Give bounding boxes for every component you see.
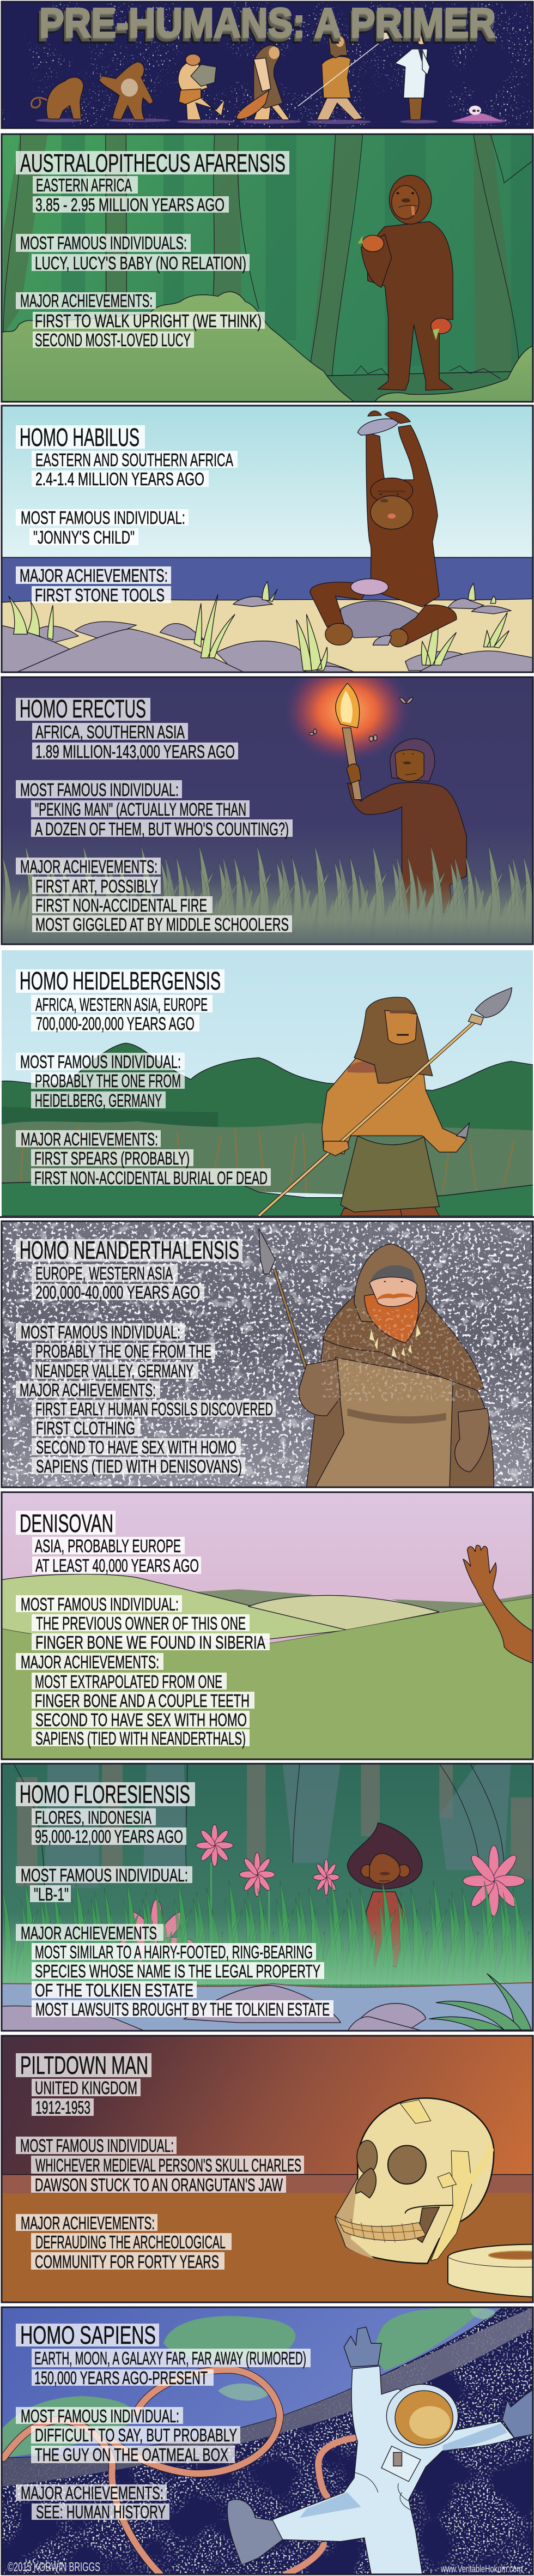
tape roll <box>448 2245 534 2297</box>
text block: major achievements <box>16 1380 276 1476</box>
text block: major achievements: SECOND TO HAVE SEX WITH HOMO <box>35 1710 247 1730</box>
panel: Australopithecus afarensis <box>1 134 534 402</box>
text block: major achievements: SECOND MOST-LOVED LUCY <box>35 330 191 350</box>
text block: place and dates <box>32 1807 186 1847</box>
copyright credit: ©2015 KORWIN BRIGGS <box>8 2560 100 2574</box>
panel: Piltdown man <box>0 2036 534 2302</box>
text block: major achievements <box>16 2483 169 2522</box>
text block: major achievements: FIRST EARLY HUMAN FOSSILS DISCOVERED <box>35 1399 273 1419</box>
text block: place and dates: 1.89 MILLION-143,000 YEARS AGO <box>35 741 235 762</box>
heading: Australopithecus afarensis <box>16 149 289 177</box>
text block: major achievements: FIRST ART, POSSIBLY <box>35 876 158 896</box>
text block: most famous individual: MOST FAMOUS INDIVIDUAL: <box>20 1052 181 1072</box>
sea and beach <box>0 558 534 672</box>
heading: Homo habilus: HOMO HABILUS <box>20 423 139 451</box>
title: stone lettering: PRE-HUMANS: A PRIMER <box>36 5 494 52</box>
text block: most famous individual <box>16 2135 304 2195</box>
text block: major achievements: FIRST SPEARS (PROBABLY) <box>34 1148 190 1168</box>
text block: major achievements: MAJOR ACHIEVEMENTS: <box>20 565 168 586</box>
heading: Homo sapiens: HOMO SAPIENS <box>20 2321 156 2349</box>
heading: Denisovan: DENISOVAN <box>20 1509 113 1537</box>
text block: major achievements: MOST SIMILAR TO A HAIRY-FOOTED, RING-BEARING <box>35 1942 313 1962</box>
text block: most famous individual: MOST FAMOUS INDIVIDUAL: <box>20 2135 174 2156</box>
text block: most famous individual: MOST FAMOUS INDIVIDUAL: <box>21 2406 179 2426</box>
neanderthal in furs with spear <box>259 1228 494 1487</box>
text block: place and dates: 3.85 - 2.95 MILLION YEARS AGO <box>35 195 224 215</box>
oxygen hose <box>3 2370 354 2574</box>
text block: most famous individual: PROBABLY THE ONE FROM THE <box>35 1341 211 1361</box>
text block: major achievements: FINGER BONE AND A COUPLE TEETH <box>35 1691 250 1711</box>
text block: major achievements: SAPIENS (TIED WITH NEANDERTHALS) <box>35 1728 246 1748</box>
text block: most famous individual <box>16 1052 185 1111</box>
text block: most famous individual: PROBABLY THE ONE FROM <box>35 1071 181 1091</box>
australopithecus figure with apples <box>357 175 453 390</box>
text block: major achievements <box>16 565 171 605</box>
line-up of evolving figures <box>32 30 438 124</box>
heading: Homo habilus <box>16 423 145 451</box>
text block: most famous individual: MOST FAMOUS INDIVIDUAL: <box>20 780 179 800</box>
habilus figure holding stone overhead <box>310 411 457 647</box>
text block: most famous individual: MOST FAMOUS INDIVIDUAL: <box>21 1865 188 1885</box>
text block: place and dates: 1912-1953 <box>35 2097 90 2117</box>
skull on purple pile <box>451 106 506 124</box>
heading: Homo neanderthalensis <box>16 1236 242 1264</box>
text block: place and dates <box>32 1536 201 1576</box>
text block: place and dates <box>32 722 238 762</box>
raised arm and hand <box>463 1545 534 1664</box>
text block: most famous individual: THE GUY ON THE OATMEAL BOX <box>35 2445 228 2465</box>
text block: major achievements: FIRST NON-ACCIDENTAL FIRE <box>35 895 207 915</box>
text block: most famous individuals: LUCY, LUCY'S BABY (NO RELATION) <box>35 253 246 273</box>
text block: place and dates: 200,000-40,000 YEARS AGO <box>35 1282 200 1302</box>
text block: most famous individual <box>16 508 189 547</box>
title: stone lettering: PRE-HUMANS: A PRIMER <box>39 0 496 46</box>
panel: Homo sapiens <box>0 2303 534 2574</box>
text block: major achievements: MOST GIGGLED AT BY MIDDLE SCHOOLERS <box>35 914 289 934</box>
text block: major achievements: DEFRAUDING THE ARCHEOLOGICAL <box>35 2232 226 2252</box>
forest trees <box>3 134 534 402</box>
heading: Piltdown man: PILTDOWN MAN <box>20 2051 148 2079</box>
taped skull <box>336 2098 494 2264</box>
text block: most famous individual: "PEKING MAN" (ACTUALLY MORE THAN <box>35 799 246 819</box>
text block: most famous individual: HEIDELBERG, GERMANY <box>35 1090 162 1111</box>
water, bank and rocks <box>0 1974 534 2032</box>
text block: major achievements <box>16 291 265 350</box>
text block: most famous individual: DAWSON STUCK TO AN ORANGUTAN'S JAW <box>35 2175 283 2195</box>
text block: place and dates <box>32 2078 141 2117</box>
text block: major achievements: SPECIES WHOSE NAME IS THE LEGAL PROPERTY <box>35 1961 320 1981</box>
text block: most famous individual: NEANDER VALLEY, GERMANY <box>35 1361 193 1381</box>
text block: most famous individuals: MOST FAMOUS INDIVIDUALS: <box>20 233 187 253</box>
heading: Homo heidelbergensis <box>16 967 224 995</box>
text block: most famous individual: DIFFICULT TO SAY, BUT PROBABLY <box>35 2425 237 2445</box>
heading: Homo erectus: HOMO ERECTUS <box>20 695 146 723</box>
text block: most famous individuals <box>16 233 250 273</box>
text block: most famous individual: WHICHEVER MEDIEVAL PERSON'S SKULL CHARLES <box>35 2155 301 2175</box>
text block: major achievements: SECOND TO HAVE SEX WITH HOMO <box>36 1437 236 1457</box>
text block: major achievements: MAJOR ACHIEVEMENTS: <box>21 1652 159 1672</box>
text block: place and dates: FLORES, INDONESIA <box>35 1807 151 1827</box>
text block: most famous individual <box>16 1865 192 1904</box>
text block: place and dates: EASTERN AFRICA <box>36 175 132 195</box>
text block: most famous individual <box>16 780 293 839</box>
heading: Denisovan <box>16 1509 116 1537</box>
panel: Homo habilus <box>0 406 534 672</box>
text block: most famous individual <box>16 1322 215 1381</box>
panel: Homo erectus <box>0 658 534 945</box>
text block: most famous individual: "JONNY'S CHILD" <box>33 527 135 547</box>
text block: place and dates: AFRICA, SOUTHERN ASIA <box>35 722 185 742</box>
text block: major achievements: FIRST TO WALK UPRIGHT (WE THINK) <box>35 311 262 331</box>
text block: major achievements <box>16 2213 232 2272</box>
panel: Homo neanderthalensis <box>2 1221 533 1487</box>
panel: Denisovan <box>0 1492 534 1759</box>
text block: most famous individual: MOST FAMOUS INDIVIDUAL: <box>21 508 185 528</box>
text block: major achievements: MAJOR ACHIEVEMENTS: <box>20 856 157 877</box>
text block: major achievements <box>16 856 292 934</box>
heading: Homo erectus <box>16 695 150 723</box>
bushes <box>1 292 534 402</box>
text block: place and dates: 150,000 YEARS AGO-PRESENT <box>34 2368 208 2388</box>
text block: most famous individual: FINGER BONE WE FOUND IN SIBERIA <box>35 1632 265 1652</box>
text block: major achievements: FIRST NON-ACCIDENTAL BURIAL OF DEAD <box>34 1168 268 1188</box>
panel: header <box>2 0 533 128</box>
heading: Homo neanderthalensis: HOMO NEANDERTHALENSIS <box>20 1236 239 1264</box>
text block: major achievements: MAJOR ACHIEVEMENTS: <box>20 291 153 311</box>
text block: place and dates: ASIA, PROBABLY EUROPE <box>35 1536 181 1556</box>
text block: major achievements: MOST EXTRAPOLATED FROM ONE <box>35 1672 222 1692</box>
table and wall band <box>0 2175 534 2302</box>
text block: major achievements <box>16 1652 254 1748</box>
text block: most famous individual: A DOZEN OF THEM, BUT WHO'S COUNTING?) <box>35 819 289 839</box>
text block: major achievements: COMMUNITY FOR FORTY YEARS <box>35 2252 219 2272</box>
text block: major achievements: SEE: HUMAN HISTORY <box>36 2502 166 2522</box>
astronaut <box>227 2327 534 2574</box>
homo heidelbergensis with spear <box>259 988 512 1216</box>
panel: Homo heidelbergensis <box>0 950 534 1218</box>
text block: place and dates: AT LEAST 40,000 YEARS AGO <box>35 1555 199 1576</box>
text block: major achievements: MAJOR ACHIEVEMENTS <box>21 1923 157 1943</box>
text block: place and dates: 2.4-1.4 MILLION YEARS AGO <box>35 469 204 489</box>
text block: place and dates: EUROPE, WESTERN ASIA <box>35 1263 173 1283</box>
title: stone lettering: PRE-HUMANS: A PRIMER <box>38 3 495 50</box>
text block: place and dates <box>32 1263 204 1302</box>
heading: Australopithecus afarensis: AUSTRALOPITHECUS AFARENSIS <box>20 149 286 177</box>
panel: Homo floresiensis <box>0 1764 534 2032</box>
heading: Homo floresiensis: HOMO FLORESIENSIS <box>20 1780 190 1808</box>
text block: place and dates: 700,000-200,000 YEARS AGO <box>36 1013 195 1034</box>
text block: major achievements <box>16 1129 271 1188</box>
text block: most famous individual: "LB-1" <box>34 1884 69 1904</box>
text block: major achievements: SAPIENS (TIED WITH DENISOVANS) <box>36 1456 242 1476</box>
homo erectus with torch, moths and grass <box>0 658 534 945</box>
text block: place and dates: EARTH, MOON, A GALAXY FAR, FAR AWAY (RUMORED) <box>34 2348 306 2368</box>
text block: place and dates <box>32 2348 311 2388</box>
text block: most famous individual: MOST FAMOUS INDIVIDUAL: <box>21 1322 180 1342</box>
text block: major achievements: FIRST STONE TOOLS <box>35 585 165 605</box>
text block: major achievements: FIRST CLOTHING <box>36 1418 135 1438</box>
text block: major achievements: MAJOR ACHIEVEMENTS: <box>21 1129 158 1149</box>
text block: place and dates <box>32 450 238 489</box>
text block: most famous individual: MOST FAMOUS INDIVIDUAL: <box>21 1594 179 1614</box>
text block: most famous individual <box>16 2406 240 2465</box>
text block: most famous individual <box>16 1594 270 1652</box>
text block: major achievements: MAJOR ACHIEVEMENTS: <box>21 2483 163 2503</box>
text block: major achievements: OF THE TOLKIEN ESTATE <box>35 1980 193 2000</box>
heading: Piltdown man <box>16 2051 151 2079</box>
text block: place and dates <box>31 994 213 1034</box>
text block: place and dates <box>33 175 229 215</box>
forest background <box>0 1043 534 1216</box>
text block: major achievements: MOST LAWSUITS BROUGHT BY THE TOLKIEN ESTATE <box>35 1999 330 2019</box>
text block: major achievements: MAJOR ACHIEVEMENTS: <box>21 2213 155 2233</box>
text block: most famous individual: THE PREVIOUS OWNER OF THIS ONE <box>36 1613 246 1633</box>
text block: place and dates: 95,000-12,000 YEARS AGO <box>35 1826 183 1847</box>
rolling hills <box>0 1574 534 1759</box>
heading: Homo floresiensis <box>16 1780 195 1808</box>
rocks and grass <box>0 582 534 672</box>
forest, child and flowers <box>0 1764 534 2030</box>
earth and atmosphere <box>0 2303 534 2487</box>
text block: major achievements: MAJOR ACHIEVEMENTS: <box>20 1380 156 1400</box>
text block: place and dates: AFRICA, WESTERN ASIA, EUROPE <box>35 994 208 1015</box>
text block: major achievements <box>16 1923 333 2019</box>
text block: place and dates: UNITED KINGDOM <box>35 2078 137 2098</box>
heading: Homo heidelbergensis: HOMO HEIDELBERGENSIS <box>20 967 221 995</box>
text block: place and dates: EASTERN AND SOUTHERN AFRICA <box>35 450 233 470</box>
